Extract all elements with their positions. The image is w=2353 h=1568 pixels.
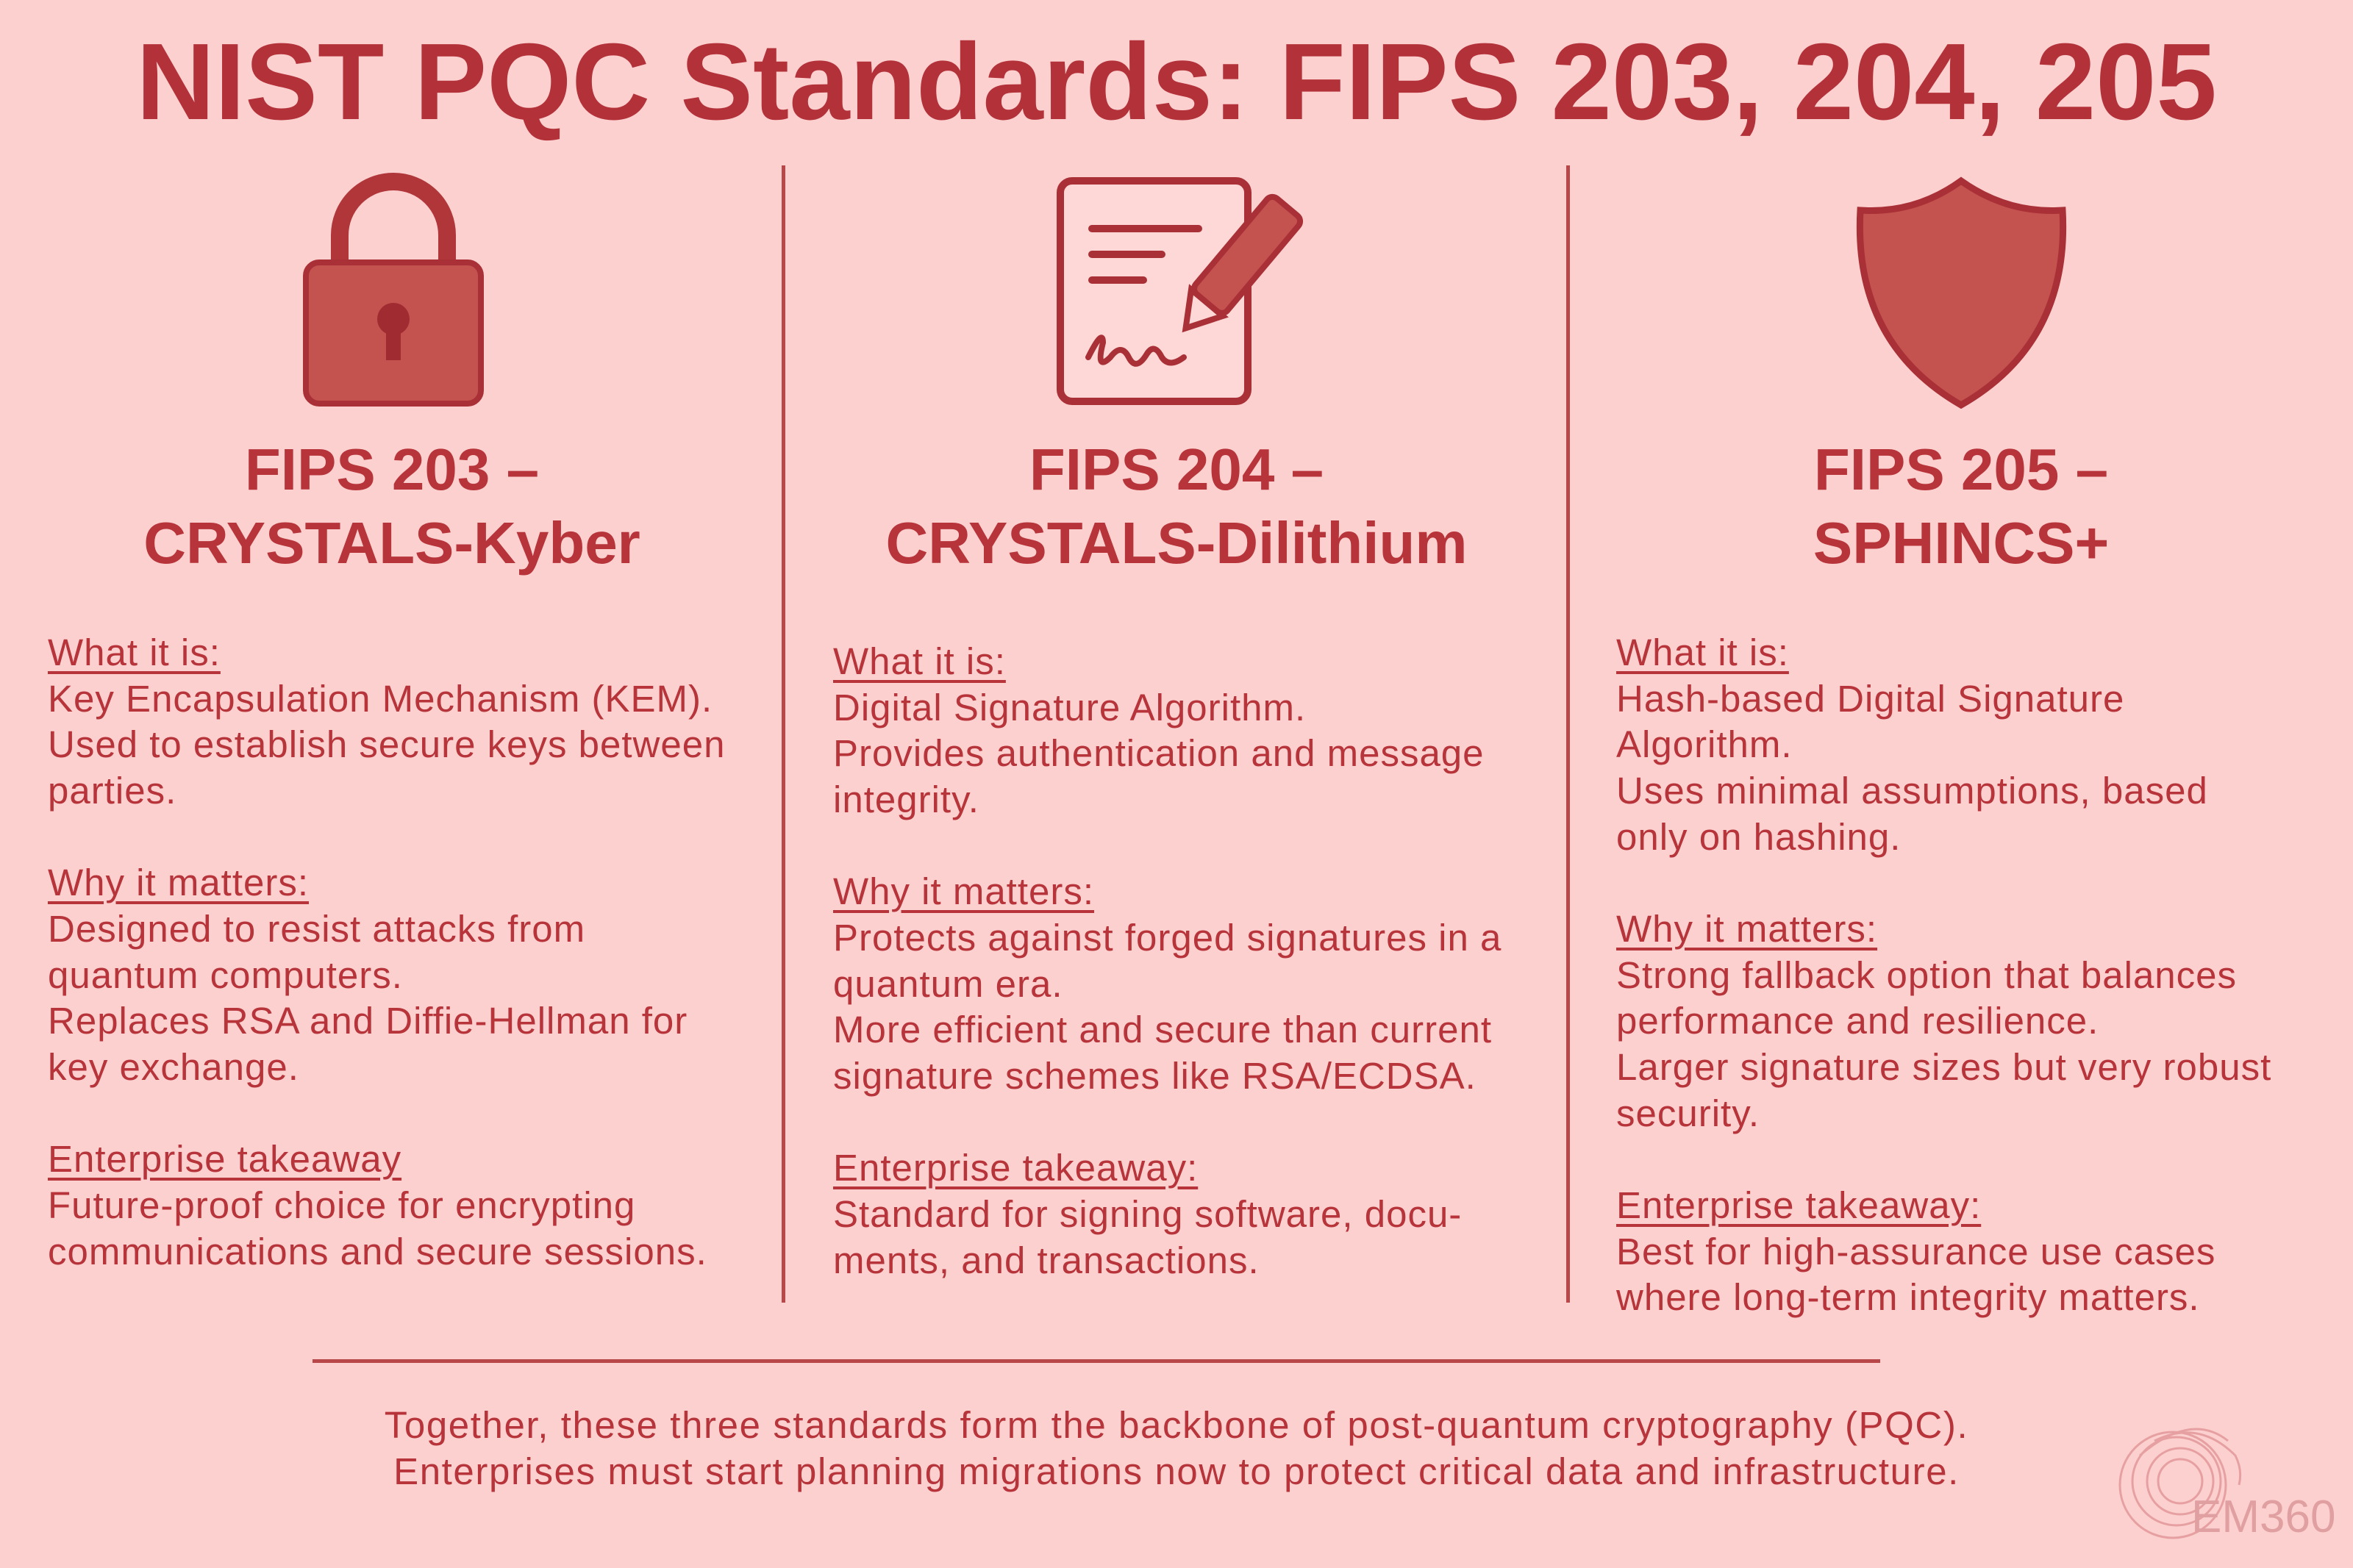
text: column 2: Protects against forged signatures in a xyxy=(833,917,1502,959)
heading: FIPS 204: CRYSTALS-Dilithium xyxy=(885,510,1468,576)
text: column 1: quantum computers. xyxy=(48,954,403,996)
text: column 2: Standard for signing software, docu- xyxy=(833,1193,1462,1235)
icon: shield xyxy=(1856,176,2066,409)
footer text: Together, these three standards form the backbone of post-quantum cryptography (PQC). xyxy=(385,1404,1968,1446)
text: column 2: signature schemes like RSA/ECDSA. xyxy=(833,1055,1477,1097)
text: column 1: Designed to resist attacks from xyxy=(48,908,585,950)
text: column 1: Future-proof choice for encrypting xyxy=(48,1184,635,1226)
text: column 2: Provides authentication and message xyxy=(833,732,1485,774)
text: column 1: parties. xyxy=(48,770,176,812)
text: column 3: Strong fallback option that balances xyxy=(1616,954,2237,996)
text: column 1: What it is: xyxy=(48,631,221,673)
text: column 3: Algorithm. xyxy=(1616,723,1793,765)
text: column 2: Why it matters: xyxy=(833,870,1094,912)
text: column 1 xyxy=(48,631,725,1272)
text: column 3: security. xyxy=(1616,1092,1760,1134)
logo: EM360 xyxy=(2119,1428,2335,1542)
logo: EM360: EM360 xyxy=(2191,1492,2335,1542)
text: column 3: Why it matters: xyxy=(1616,908,1877,950)
title: NIST PQC Standards: FIPS 203, 204, 205 xyxy=(136,21,2217,143)
text: column 1: key exchange. xyxy=(48,1046,299,1088)
text: column 3: Uses minimal assumptions, based xyxy=(1616,770,2208,812)
text: column 1: Replaces RSA and Diffie-Hellman for xyxy=(48,1000,688,1042)
text: column 3: Best for high-assurance use cases xyxy=(1616,1231,2215,1272)
text: column 2: More efficient and secure than current xyxy=(833,1009,1492,1050)
text: column 2 xyxy=(833,640,1502,1281)
text: column 1: Why it matters: xyxy=(48,862,309,903)
icon: padlock xyxy=(303,173,484,407)
footer text: Enterprises must start planning migrations now to protect critical data and infrastructure. xyxy=(393,1450,1960,1492)
text: column 3: only on hashing. xyxy=(1616,816,1901,858)
heading: FIPS 204 xyxy=(885,437,1468,576)
heading: FIPS 203: FIPS 203 – xyxy=(245,437,539,502)
heading: FIPS 205 xyxy=(1813,437,2109,576)
heading: FIPS 205: FIPS 205 – xyxy=(1814,437,2108,502)
text: column 1: communications and secure sessions. xyxy=(48,1231,707,1272)
text: column 3: Enterprise takeaway: xyxy=(1616,1184,1981,1226)
text: column 2: quantum era. xyxy=(833,963,1063,1005)
text: column 1: Enterprise takeaway xyxy=(48,1138,401,1180)
text: column 3: performance and resilience. xyxy=(1616,1000,2099,1042)
text: column 3: Larger signature sizes but very robust xyxy=(1616,1046,2271,1088)
footer text xyxy=(385,1404,1968,1492)
text: column 3 xyxy=(1616,631,2271,1318)
text: column 3: What it is: xyxy=(1616,631,1789,673)
heading: FIPS 203 xyxy=(143,437,640,576)
text: column 2: Digital Signature Algorithm. xyxy=(833,687,1306,728)
text: column 3: where long-term integrity matters. xyxy=(1616,1276,2200,1318)
heading: FIPS 204: FIPS 204 – xyxy=(1029,437,1324,502)
text: column 3: Hash-based Digital Signature xyxy=(1616,678,2124,720)
heading: FIPS 205: SPHINCS+ xyxy=(1813,510,2109,576)
text: column 1: Used to establish secure keys between xyxy=(48,723,725,765)
text: column 1: Key Encapsulation Mechanism (KEM). xyxy=(48,678,713,720)
text: column 2: ments, and transactions. xyxy=(833,1239,1260,1281)
text: column 2: integrity. xyxy=(833,778,979,820)
heading: FIPS 203: CRYSTALS-Kyber xyxy=(143,510,640,576)
icon: signed document xyxy=(1057,177,1303,405)
text: column 2: Enterprise takeaway: xyxy=(833,1147,1198,1189)
text: column 2: What it is: xyxy=(833,640,1006,682)
